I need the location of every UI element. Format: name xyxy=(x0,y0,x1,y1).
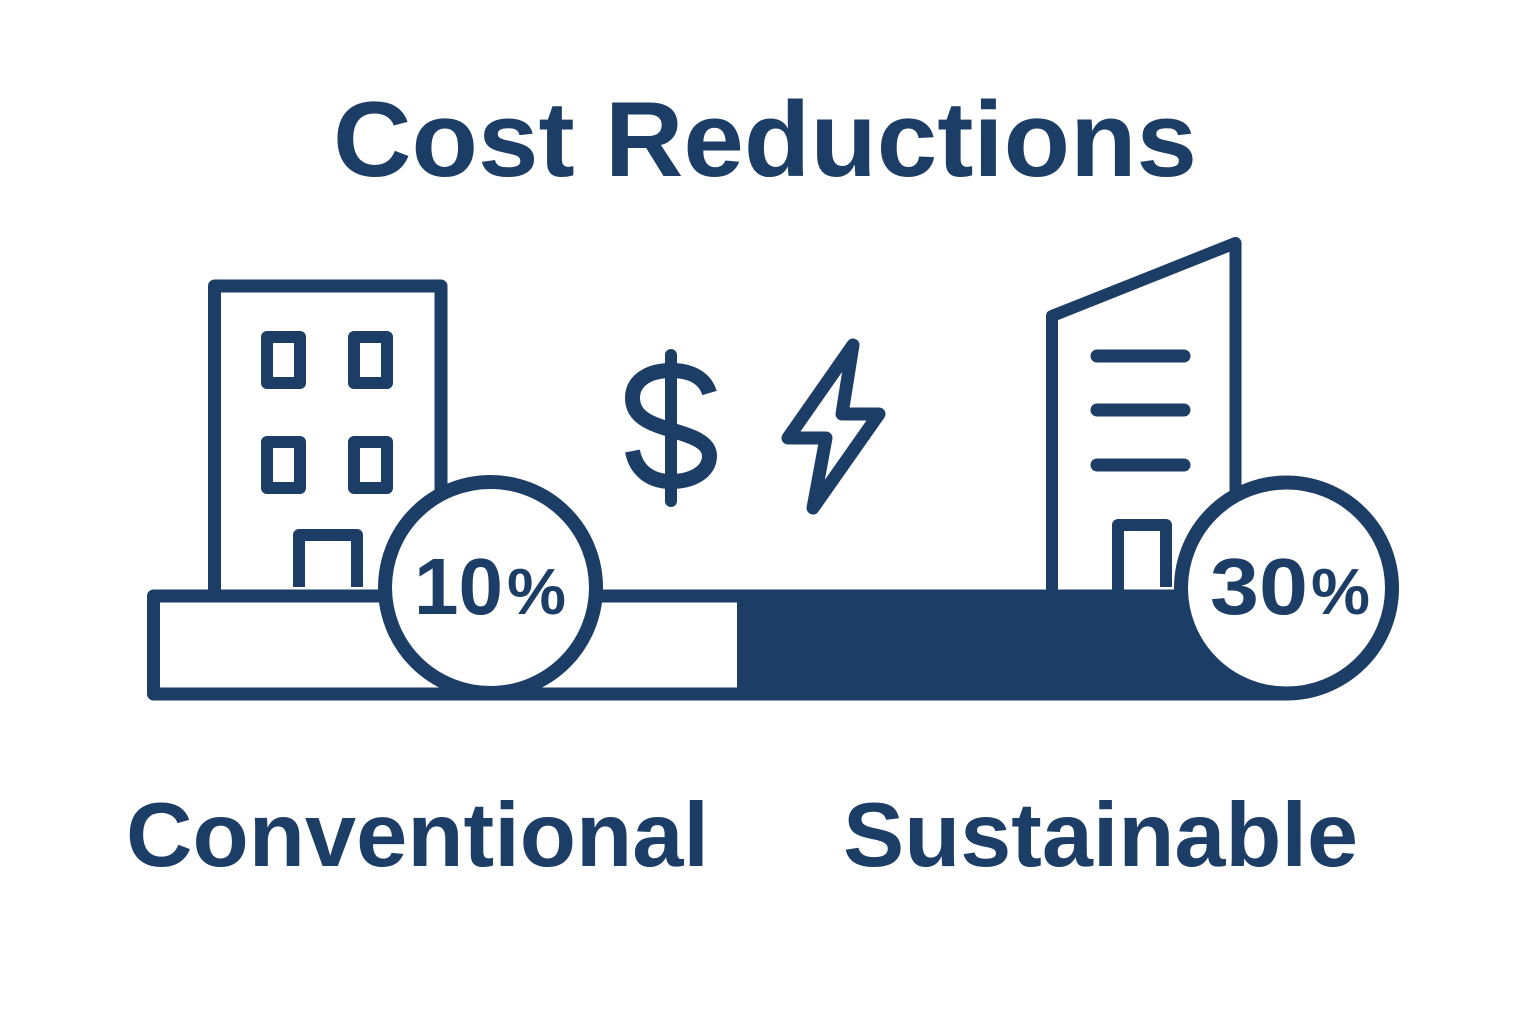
badge: 10% xyxy=(385,482,596,693)
badge: 30% xyxy=(1181,482,1392,694)
label: conventional: Conventional xyxy=(126,785,709,886)
icon: sustainable building xyxy=(1052,243,1236,592)
icon: dollar sign xyxy=(632,355,710,501)
badge: 30%: % xyxy=(1311,555,1370,628)
badge: 10%: 10 xyxy=(414,542,503,631)
badge: 30%: 30 xyxy=(1210,542,1308,631)
badge: 10%: % xyxy=(507,555,566,628)
title: Cost Reductions xyxy=(333,79,1197,199)
progress bar xyxy=(154,590,1286,700)
label: sustainable: Sustainable xyxy=(843,785,1358,886)
icon: lightning bolt xyxy=(788,345,879,508)
icon: conventional building xyxy=(214,286,441,592)
